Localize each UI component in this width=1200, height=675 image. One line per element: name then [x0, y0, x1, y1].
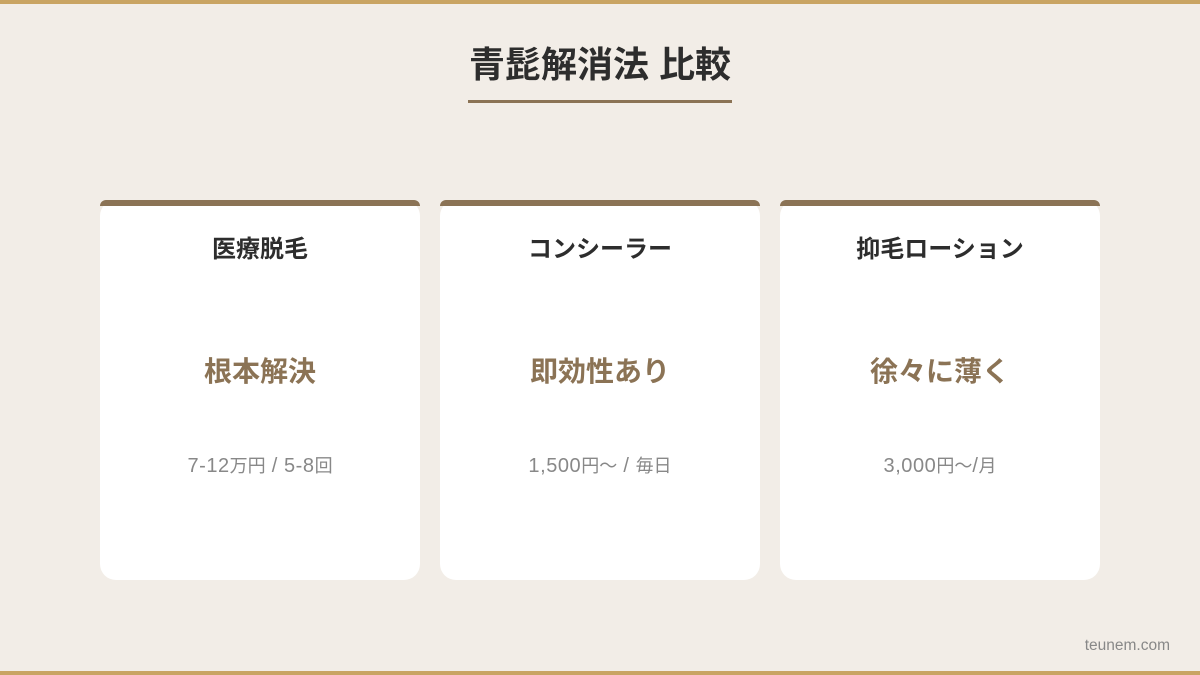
- top accent bar: [0, 0, 1200, 4]
- panel: medical hair removal: [100, 200, 420, 580]
- panel: concealer: [440, 200, 760, 580]
- bottom accent bar: [0, 671, 1200, 675]
- panel: hair inhibitor lotion: [780, 200, 1100, 580]
- card top bar: [440, 200, 760, 206]
- card key benefit: 即効性あり: [530, 356, 670, 387]
- card key benefit: 根本解決: [204, 356, 316, 387]
- card key benefit: 徐々に薄く: [870, 356, 1010, 387]
- title: 青髭解消法 比較: [469, 44, 731, 85]
- card heading: 抑毛ローション: [856, 236, 1024, 263]
- title underline: [468, 100, 732, 103]
- card heading: 医療脱毛: [212, 236, 308, 263]
- card heading: コンシーラー: [528, 236, 672, 263]
- card price detail: 7-12万円 / 5-8回: [187, 455, 333, 477]
- footer site name: teunem.com: [1085, 637, 1170, 654]
- card top bar: [780, 200, 1100, 206]
- card price detail: 3,000円〜/月: [884, 455, 996, 477]
- card top bar: [100, 200, 420, 206]
- card price detail: 1,500円〜 / 毎日: [528, 455, 672, 477]
